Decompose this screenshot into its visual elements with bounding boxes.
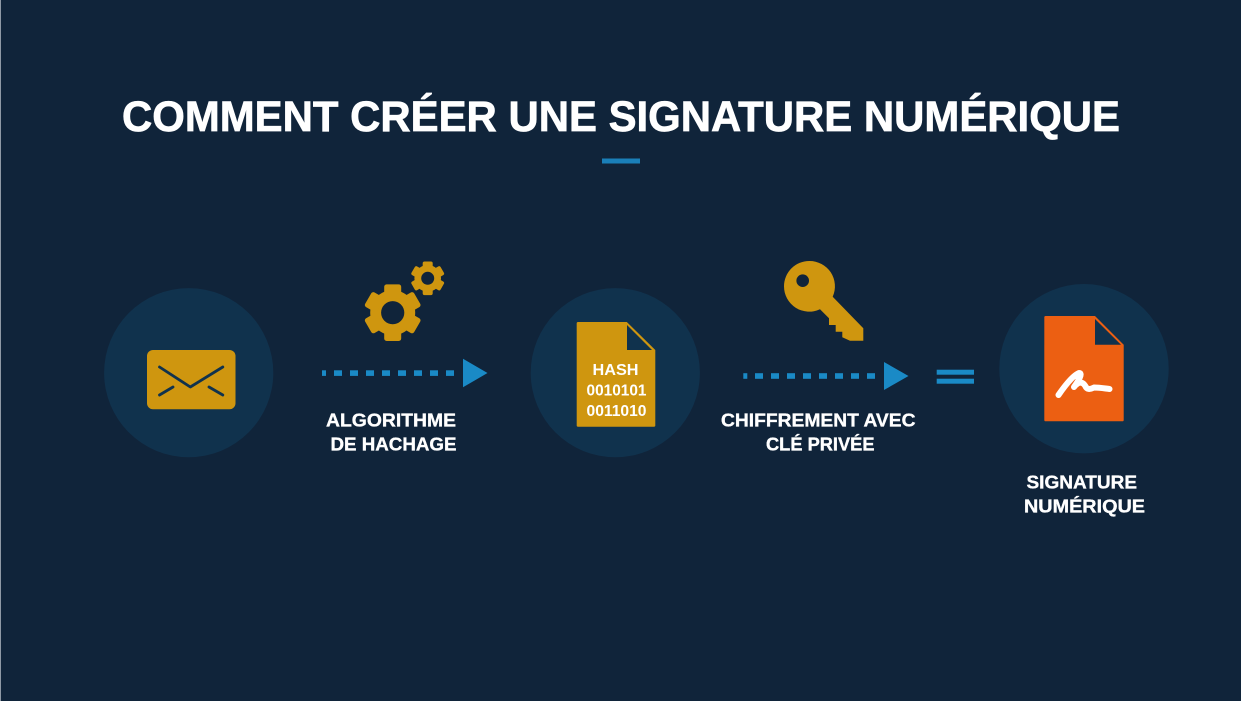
label: digital signature: NUMÉRIQUE xyxy=(1024,496,1145,517)
label: private key encryption xyxy=(721,410,916,455)
label: digital signature xyxy=(1024,472,1145,517)
icon: signed document xyxy=(1044,316,1124,421)
hash text: HASH xyxy=(592,362,638,379)
hash text xyxy=(586,362,647,420)
hash text: 0011010 xyxy=(586,403,647,420)
icon: envelope xyxy=(147,350,236,409)
label: hashing algorithm xyxy=(326,410,456,455)
label: private key encryption: CHIFFREMENT AVEC xyxy=(721,410,916,431)
step 1: message circle with envelope xyxy=(104,288,273,457)
label: private key encryption: CLÉ PRIVÉE xyxy=(766,434,874,455)
step 2: hash circle with document xyxy=(531,288,700,457)
icon: hash document xyxy=(577,322,655,427)
step 3: signature circle with document xyxy=(999,284,1169,453)
arrow: private key encryption xyxy=(743,362,908,390)
arrow: hashing algorithm xyxy=(322,359,488,387)
label: hashing algorithm: ALGORITHME xyxy=(326,410,456,431)
signature scribble xyxy=(1058,373,1110,395)
title: COMMENT CRÉER UNE SIGNATURE NUMÉRIQUE xyxy=(122,93,1120,141)
label: digital signature: SIGNATURE xyxy=(1026,472,1137,492)
title underline xyxy=(602,158,640,164)
icon: gears xyxy=(364,262,445,341)
hash text: 0010101 xyxy=(586,382,647,400)
label: hashing algorithm: DE HACHAGE xyxy=(330,434,456,455)
equals sign xyxy=(937,370,974,384)
icon: key xyxy=(784,261,863,341)
